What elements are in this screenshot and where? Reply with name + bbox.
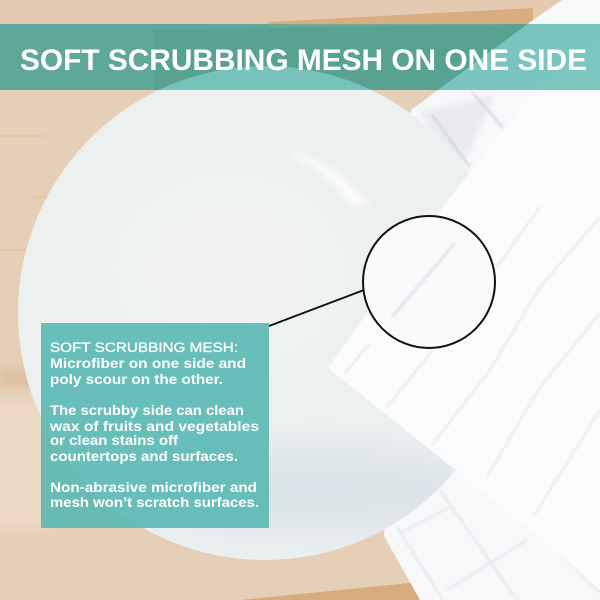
mesh description text: poly scour on the other. [50,371,223,387]
title: SOFT SCRUBBING MESH ON ONE SIDE [20,44,587,77]
mesh description text: The scrubby side can clean [50,402,244,418]
callout leader line [269,290,364,326]
dinner plate [18,66,512,560]
mesh description text [49,339,259,510]
mesh description text: or clean stains off [50,432,178,448]
mesh description text: Non-abrasive microfiber and [50,479,257,495]
magnified mesh callout [363,216,495,348]
mesh description text: countertops and surfaces. [50,448,238,464]
mesh description text: wax of fruits and vegetables [49,418,259,434]
description panel [41,323,269,528]
mesh description text: Microfiber on one side and [50,355,246,371]
lower towel layer [384,0,600,600]
mesh description text: mesh won’t scratch surfaces. [50,494,259,510]
title banner [0,24,600,90]
upper towel layer [328,40,600,590]
mesh description text: SOFT SCRUBBING MESH: [50,339,238,355]
